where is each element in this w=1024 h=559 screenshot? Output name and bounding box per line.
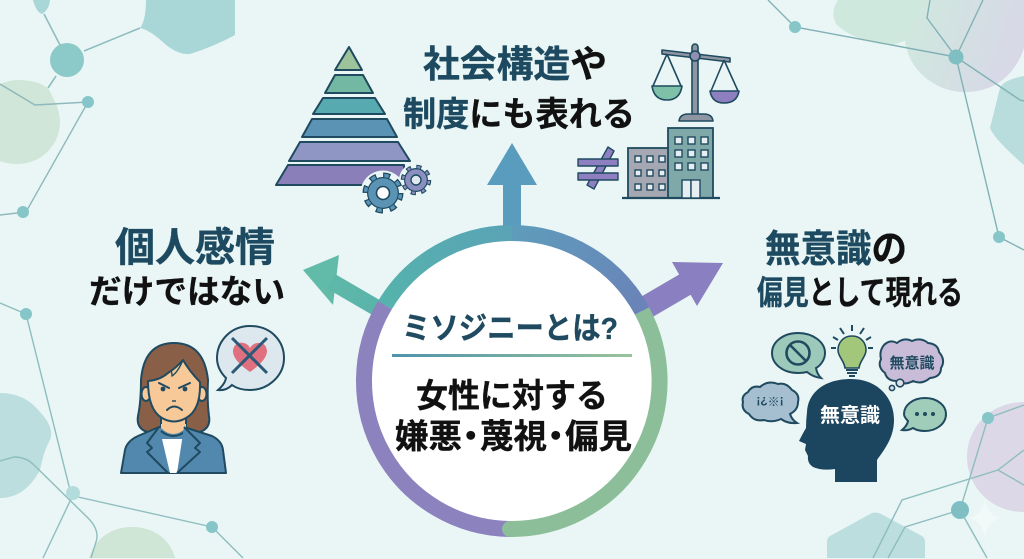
heading: social structure <box>403 44 635 134</box>
icon: ellipsis speech bubble <box>902 398 946 431</box>
central circle <box>364 233 660 537</box>
arrow: up <box>487 143 537 236</box>
icon: not equal sign <box>578 147 618 189</box>
center definition line 2: ・ <box>454 419 488 456</box>
network decoration: bottom right <box>827 402 1024 558</box>
icon: light bulb <box>831 325 873 376</box>
icon: scales <box>652 44 739 121</box>
arrow: right <box>632 262 723 322</box>
icon: head silhouette <box>799 379 894 482</box>
head label: 無意識 <box>820 404 880 427</box>
network decoration: top left <box>0 0 235 218</box>
icon: angry woman <box>121 343 226 473</box>
icon: blue-grey cloud bubble: !※?! <box>756 394 784 408</box>
icon: buildings <box>622 128 720 198</box>
heading: not just personal emotion <box>89 226 285 310</box>
heading: social structure: 制度にも表れる <box>403 96 635 134</box>
center definition line 2: ・ <box>539 419 572 456</box>
ring: teal segment <box>385 233 512 305</box>
center title: ミソジニーとは? <box>402 311 618 346</box>
ring: blue segment <box>512 233 642 311</box>
icon: pyramid with gears <box>276 47 433 216</box>
icon: prohibition speech bubble <box>772 333 825 378</box>
heading: unconscious bias <box>757 229 963 311</box>
center definition: 女性に対する <box>416 377 608 414</box>
icon: thought cloud with text <box>880 339 943 391</box>
icon: speech bubble with crossed-out heart <box>217 326 284 390</box>
heading: social structure: 社会構造や <box>423 44 607 85</box>
network decoration: top right <box>768 0 1024 250</box>
ring: green rounded end <box>502 521 518 537</box>
arrow: left <box>303 255 390 320</box>
network decoration: bottom left <box>0 303 243 558</box>
icon: blue-grey cloud bubble <box>743 383 798 423</box>
ring: green segment <box>512 311 660 529</box>
heading: not just personal emotion: 個人感情 <box>115 226 275 270</box>
icon: thought cloud with text: 無意識 <box>889 355 935 372</box>
heading: unconscious bias: 無意識の <box>765 229 907 271</box>
small gear <box>403 167 429 193</box>
center rule <box>392 354 632 357</box>
center definition line 2: 偏見 <box>565 419 632 456</box>
ring: purple segment <box>364 305 512 529</box>
center definition line 2: 嫌悪 <box>395 419 462 456</box>
heading: unconscious bias: 偏見として現れる <box>757 274 963 311</box>
big gear <box>366 176 400 210</box>
center definition line 2: 蔑視 <box>480 419 547 456</box>
heading: not just personal emotion: だけではない <box>89 273 285 310</box>
